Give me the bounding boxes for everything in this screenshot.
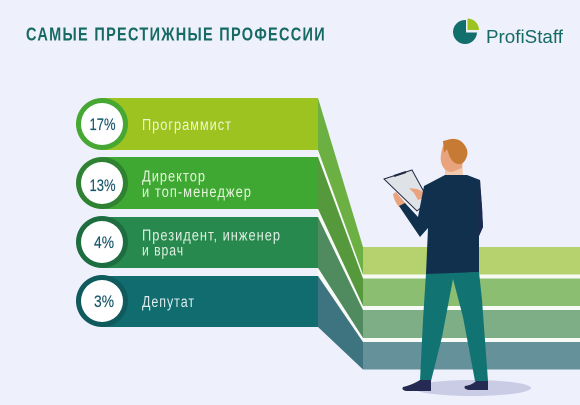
row 4: Депутат 3%: 3% [94,293,114,311]
hair [443,139,467,164]
row 2: Директор и топ-менеджер 13% [76,157,318,209]
neck [445,162,463,176]
floor shadow [413,380,531,396]
hands [409,188,424,200]
row 1: Программист 17%: Программист [142,117,232,134]
head [441,146,464,172]
illustration: man with clipboard [384,139,531,396]
shoes [402,380,488,391]
row 1: Программист 17%: 17% [90,116,116,134]
title: САМЫЕ ПРЕСТИЖНЫЕ ПРОФЕССИИ [26,24,326,44]
logo: ProfiStaff: ProfiStaff [486,27,564,47]
right side stripes [363,247,580,370]
row 2: Директор и топ-менеджер 13%: и топ-менеджер [142,184,252,201]
row 1: Программист 17% [76,98,318,150]
row 2: Директор и топ-менеджер 13%: Директор [142,168,206,186]
clipboard [384,170,430,211]
row 4: Депутат 3%: Депутат [142,294,195,311]
row 3: Президент, инженер и врач 4%: Президент, инженер [142,228,281,244]
row 3: Президент, инженер и врач 4%: и врач [142,242,184,260]
row 2: Директор и топ-менеджер 13%: 13% [90,177,116,195]
row 3: Президент, инженер и врач 4%: 4% [94,234,114,252]
trousers [420,272,488,381]
perspective side panels [318,98,363,370]
jacket [399,175,483,274]
row 3: Президент, инженер и врач 4% [76,216,318,268]
logo: ProfiStaff [453,18,564,47]
row 4: Депутат 3% [76,275,318,327]
